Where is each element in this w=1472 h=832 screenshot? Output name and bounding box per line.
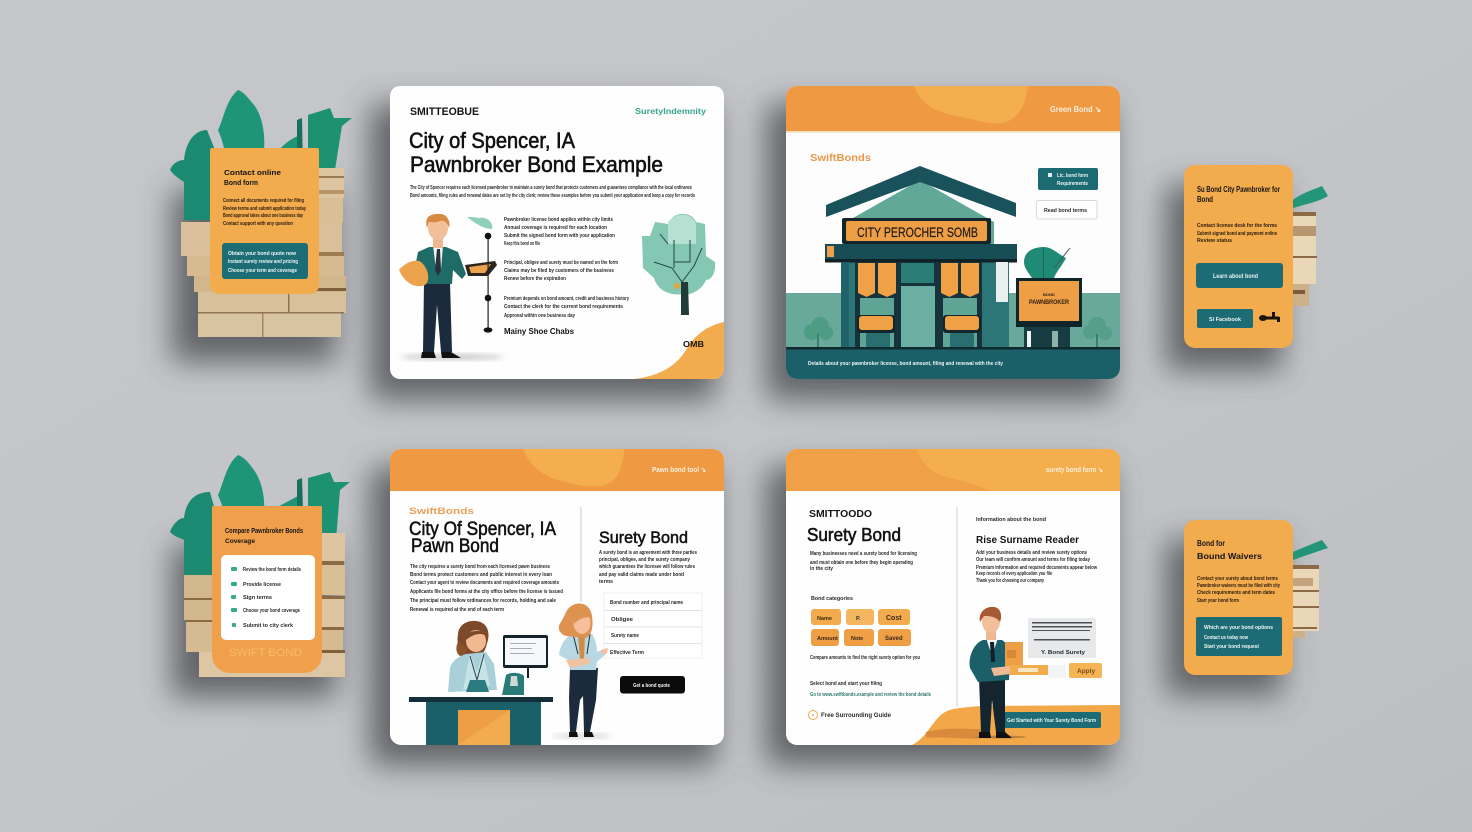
right column text xyxy=(976,550,1097,584)
illustration: person holding tablet xyxy=(399,214,504,359)
bond form mock: Y. Bond Surety xyxy=(1041,650,1085,656)
card heading: Bond form xyxy=(224,178,258,187)
black button xyxy=(620,676,685,694)
orange header xyxy=(390,449,724,491)
checklist panel xyxy=(221,555,315,640)
orange header xyxy=(786,449,1120,491)
text block 1: Pawnbroker license bond applies within city limits xyxy=(504,217,613,223)
card heading: Compare Pawnbroker Bonds xyxy=(225,528,303,535)
orange apply button: Apply xyxy=(1077,668,1095,675)
footer band: Details about your pawnbroker license, bond amount, filing and renewal with the city xyxy=(808,361,1003,367)
surety bond text: principal, obligee, and the surety company xyxy=(599,557,690,563)
teal callout xyxy=(222,243,308,279)
teal callout: Obtain your bond quote now xyxy=(228,251,296,257)
orange checklist card xyxy=(212,506,322,673)
surety bond text: terms xyxy=(599,579,613,585)
right column heading: Information about the bond xyxy=(976,517,1046,523)
intro text: and must obtain one before they begin operating xyxy=(810,560,913,566)
panel: top-right small card xyxy=(1184,165,1328,348)
title: City Of Spencer, IA xyxy=(409,519,556,540)
orange corner: OMB xyxy=(683,340,704,349)
title: Pawn Bond xyxy=(411,536,499,557)
details table xyxy=(604,593,702,658)
details table: Effective Term xyxy=(610,650,645,656)
illustration: roadside sign: PAWNBROKER xyxy=(1029,300,1070,306)
panel: city of spencer pawn bond xyxy=(390,449,724,745)
teal callout: Start your bond request xyxy=(1204,644,1259,650)
icon: stacked cardboard boxes xyxy=(181,168,346,337)
surety bond text xyxy=(598,550,697,585)
icon and link xyxy=(808,710,891,720)
right column text: Premium information and required documents appear below xyxy=(976,565,1097,571)
check row 3: Sign terms xyxy=(243,595,272,601)
card heading xyxy=(224,168,281,187)
orange apply button xyxy=(1069,663,1102,678)
right column text: Our team will confirm amount and terms for filing today xyxy=(976,557,1090,563)
card heading line 2: Bond xyxy=(1197,195,1213,204)
illustration: desk xyxy=(409,697,553,745)
text block 2 xyxy=(504,260,618,282)
icon: leaf and boxes behind card xyxy=(1293,540,1328,638)
icon: small tree right xyxy=(1083,317,1112,348)
title xyxy=(409,128,663,177)
bond form mock xyxy=(1028,618,1096,678)
panel: storefront illustration xyxy=(786,86,1120,379)
card body text: Contact your surety about bond terms xyxy=(1197,576,1278,582)
card heading: Coverage xyxy=(225,539,256,545)
text block 1 xyxy=(504,217,615,247)
contact text: Select bond and start your filing xyxy=(810,681,882,687)
intro text: Bond amounts, filing rules and renewal dates are set by the city clerk; review these examples before you submit your application and keep a copy for records xyxy=(410,193,695,199)
tags xyxy=(811,609,911,646)
text block 2: Renew before the expiration xyxy=(504,276,566,282)
details table: Obligee xyxy=(611,617,633,623)
icon and link: Free Surrounding Guide xyxy=(821,712,891,719)
text block 1: Submit the signed bond form with your application xyxy=(504,233,615,239)
card body text: Review terms and submit application today xyxy=(223,206,307,212)
body text: Bond terms protect customers and public interest in every loan xyxy=(410,572,552,578)
tags: Saved xyxy=(885,636,903,642)
card body text: Pawnbroker waivers must be filed with city xyxy=(1197,583,1281,589)
illustration: roadside sign xyxy=(1016,247,1082,348)
timeline xyxy=(467,217,492,333)
teal button xyxy=(1003,712,1101,728)
intro text: Many businesses need a surety bond for licensing xyxy=(810,551,917,557)
heading: Surety Bond xyxy=(807,525,901,545)
text line: Compare amounts to find the right surety option for you xyxy=(810,655,920,661)
teal button: Requirements xyxy=(1057,181,1088,187)
illustration: standing woman xyxy=(552,603,612,738)
small teal button: Si Facebook xyxy=(1209,317,1241,323)
black button: Get a bond quote xyxy=(633,683,670,689)
tags: P. xyxy=(856,616,861,622)
card body text: Submit signed bond and payment online xyxy=(1197,231,1277,237)
text block 3 xyxy=(504,296,629,319)
teal button: Lic. bond form xyxy=(1057,173,1088,179)
card body text: Start your bond form xyxy=(1197,598,1239,604)
card body text: Bond approval takes about one business day xyxy=(223,213,304,219)
embossed brand: SWIFT BOND xyxy=(229,647,302,659)
white button xyxy=(1036,200,1097,219)
brand label: SwiftBonds xyxy=(810,153,871,164)
panel: bottom-left bond stack xyxy=(170,455,350,677)
text block 3: Contact the clerk for the current bond requirements xyxy=(504,304,623,310)
teal callout: Which are your bond options xyxy=(1204,625,1273,631)
orange info card xyxy=(1184,165,1293,348)
panel: top-left bond stack xyxy=(170,90,352,337)
contact text xyxy=(810,681,931,698)
intro text xyxy=(410,185,695,199)
orange info card xyxy=(1184,520,1293,675)
tags: Note xyxy=(851,636,863,642)
teal callout: Choose your term and coverage xyxy=(228,268,297,274)
panel: pawnbroker bond example xyxy=(390,86,724,379)
tags: Cost xyxy=(886,615,902,622)
check row 1: Review the bond form details xyxy=(243,567,301,573)
text block 3: Approval within one business day xyxy=(504,313,575,319)
card heading: Contact online xyxy=(224,168,281,177)
body text: Renewal is required at the end of each term xyxy=(410,607,504,613)
card heading xyxy=(225,528,303,545)
body text: The city requires a surety bond from each licensed pawn business xyxy=(410,564,550,570)
white button: Read bond terms xyxy=(1044,208,1087,214)
orange header: surety bond form ↘ xyxy=(1046,465,1103,474)
body text: The principal must follow ordinances for records, holding and sale xyxy=(410,598,556,604)
card body text xyxy=(1197,223,1277,244)
title xyxy=(409,519,556,557)
divider xyxy=(580,507,582,602)
card body text: Contact support with any question xyxy=(223,221,293,227)
right column text: Thank you for choosing our company xyxy=(976,578,1044,584)
icon: key xyxy=(1259,312,1280,322)
icon: small tree left xyxy=(804,317,833,348)
details table: Surety name xyxy=(611,633,639,639)
intro text: The City of Spencer requires each licensed pawnbroker to maintain a surety bond that protects customers and guarantees compliance with the local ordinance xyxy=(410,185,692,191)
small teal button xyxy=(1197,309,1253,328)
intro text xyxy=(810,551,917,572)
title: City of Spencer, IA xyxy=(409,128,575,153)
text block 2: Principal, obligee and surety must be named on the form xyxy=(504,260,618,266)
card body text xyxy=(223,198,307,227)
orange header: Green Bond ↘ xyxy=(1050,105,1101,114)
surety bond text: and pay valid claims made under bond xyxy=(599,572,684,578)
illustration: clerk at desk xyxy=(448,621,497,692)
surety bond text: A surety bond is an agreement with three parties xyxy=(599,550,697,556)
illustration: pawn shop building xyxy=(825,166,1017,349)
orange header xyxy=(786,86,1120,133)
teal button xyxy=(1196,263,1283,288)
contact text: Go to www.swiftbonds.example and review the bond details xyxy=(810,692,931,698)
teal callout: Instant surety review and pricing xyxy=(228,259,298,265)
card heading xyxy=(1197,539,1263,561)
icon: leaf and boxes behind card xyxy=(1293,186,1328,306)
tags: Amount xyxy=(817,636,838,642)
footer band xyxy=(786,347,1120,379)
text block 3: Premium depends on bond amount, credit and business history xyxy=(504,296,629,302)
teal button xyxy=(1038,168,1098,190)
right column subheading: Rise Surname Reader xyxy=(976,534,1079,546)
illustration: roadside sign: BOND xyxy=(1043,292,1055,297)
body text xyxy=(410,564,563,613)
icon: stacked cardboard boxes xyxy=(184,533,345,677)
orange bottom wave xyxy=(912,705,1120,745)
teal button: Get Started with Your Surety Bond Form xyxy=(1007,718,1097,724)
teal ground band xyxy=(786,293,1120,349)
tag group label: Bond categories xyxy=(811,596,853,602)
intro text: in the city xyxy=(810,566,833,572)
icon: teal leaves xyxy=(170,90,352,220)
check row 4: Choose your bond coverage xyxy=(243,608,300,614)
divider xyxy=(956,507,958,707)
panel: bottom-right small card xyxy=(1184,520,1328,675)
teal callout xyxy=(1196,617,1282,656)
right column text: Keep records of every application you file xyxy=(976,571,1052,577)
orange header: Pawn bond tool ↘ xyxy=(652,465,706,474)
panel: surety bond details xyxy=(786,449,1120,745)
card heading: Bound Waivers xyxy=(1197,552,1263,561)
check row 2: Provide license xyxy=(243,582,281,588)
card heading: Bond for xyxy=(1197,539,1225,548)
surety bond heading: Surety Bond xyxy=(599,528,688,547)
text: callout label: Mainy Shoe Chabs xyxy=(504,326,574,336)
surety bond text: which guarantees the licensee will follow rules xyxy=(598,564,695,570)
teal callout: Contact us today now xyxy=(1204,635,1248,641)
orange corner xyxy=(634,322,724,379)
right column text: Add your business details and review surety options xyxy=(976,550,1087,556)
icon: teal leaves xyxy=(170,455,350,590)
illustration: man with package xyxy=(970,607,1048,738)
brand label: SMITTOODO xyxy=(809,508,872,520)
orange info card xyxy=(210,148,319,294)
card body text: Review status xyxy=(1197,238,1232,244)
card body text xyxy=(1197,576,1281,604)
illustration: monitor and register xyxy=(502,635,548,695)
brand label: SMITTEOBUE xyxy=(410,106,479,118)
teal button: Learn about bond xyxy=(1213,273,1258,280)
details table: Bond number and principal name xyxy=(610,600,683,606)
illustration: pawn shop building: CITY PEROCHER SOMB xyxy=(857,224,978,240)
illustration: teal tree xyxy=(642,214,715,315)
title: Pawnbroker Bond Example xyxy=(410,152,663,177)
text block 1: Annual coverage is required for each location xyxy=(504,225,607,231)
body text: Contact your agent to review documents and required coverage amounts xyxy=(410,580,559,586)
body text: Applicants file bond forms at the city office before the license is issued xyxy=(410,589,563,595)
card body text: Contact license desk for the forms xyxy=(1197,223,1277,229)
card body text: Check requirements and term dates xyxy=(1197,590,1275,596)
top right link: SuretyIndemnity xyxy=(635,106,706,116)
card heading: Su Bond City Pawnbroker for xyxy=(1197,185,1280,194)
tags: Name xyxy=(817,616,832,622)
text block 2: Claims may be filed by customers of the business xyxy=(504,268,614,274)
text block 1: Keep this bond on file xyxy=(504,241,540,247)
check row 5: Submit to city clerk xyxy=(243,623,293,629)
card body text: Connect all documents required for filing xyxy=(223,198,304,204)
brand label: SwiftBonds xyxy=(409,506,474,517)
